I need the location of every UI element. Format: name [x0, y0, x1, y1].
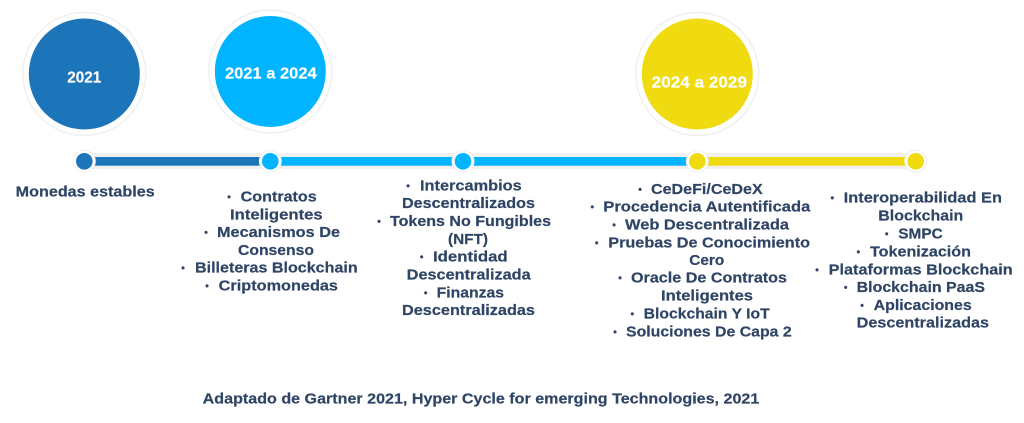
list: column 3: Tokens No Fungibles [390, 213, 551, 230]
circle: 2021: 2021 [67, 70, 101, 87]
circle: 2021 a 2024: 2021 a 2024 [225, 65, 317, 82]
list: column 2: • [205, 281, 209, 293]
list: column 4: CeDeFi/CeDeX [651, 181, 763, 198]
timeline bar with nodes [73, 150, 927, 172]
list: column 3: • [424, 287, 428, 299]
list: column 5: Plataformas Blockchain [829, 261, 1013, 278]
list: column 4: • [613, 326, 617, 338]
circle: 2024 a 2029: 2024 a 2029 [652, 74, 747, 91]
list: column 4: Soluciones De Capa 2 [626, 323, 792, 340]
list: column 5: • [844, 282, 848, 294]
list: column 5: Blockchain PaaS [857, 279, 985, 296]
list: column 5: Tokenización [870, 243, 971, 260]
list: column 3: Descentralizadas [402, 302, 535, 319]
list: column 3: Identidad [433, 249, 508, 266]
list: column 2: Billeteras Blockchain [195, 260, 358, 277]
list: column 5: Blockchain [878, 208, 963, 225]
list: column 2: Contratos [241, 189, 317, 206]
list: column 5: Descentralizadas [857, 315, 989, 332]
list: column 4: Inteligentes [661, 288, 753, 305]
list: column 3: Descentralizada [407, 266, 531, 283]
circle: 2021 [23, 12, 146, 136]
circle: 2024 a 2029 [636, 12, 759, 136]
list: column 4 [590, 181, 811, 340]
list: column 5: SMPC [898, 226, 943, 243]
list: column 3: • [377, 216, 381, 228]
list: column 3: • [406, 181, 410, 193]
list: column 4: Web Descentralizada [625, 217, 790, 234]
text: Monedas estables: Monedas estables [16, 184, 155, 201]
list: column 5: • [815, 264, 819, 276]
list: column 4: • [590, 202, 594, 214]
list: column 3: Descentralizados [402, 195, 535, 212]
list: column 2: Criptomonedas [219, 278, 338, 295]
list: column 2: Mecanismos De [217, 224, 340, 241]
list: column 5: • [885, 229, 889, 241]
list: column 3: Intercambios [420, 178, 522, 195]
source note: Adaptado de Gartner 2021, Hyper Cycle for emerging Technologies, 2021 [203, 390, 759, 407]
list: column 4: Blockchain Y IoT [644, 305, 770, 322]
list: column 5: Aplicaciones [874, 297, 972, 314]
list: column 3: • [420, 252, 424, 264]
list: column 2: Inteligentes [230, 206, 323, 224]
list: column 3 [377, 178, 551, 319]
list: column 4: • [638, 184, 642, 196]
list: column 3: Finanzas [437, 284, 504, 301]
list: column 4: Pruebas De Conocimiento [608, 234, 810, 251]
list: column 4: • [612, 220, 616, 232]
list: column 2: Consenso [238, 242, 314, 259]
list: column 2: • [181, 263, 185, 275]
list: column 4: Oracle De Contratos [631, 270, 787, 287]
list: column 2: • [227, 192, 231, 204]
list: column 2 [181, 189, 358, 295]
list: column 4: • [618, 273, 622, 285]
circle: 2021 a 2024 [209, 10, 332, 133]
list: column 2: • [204, 227, 208, 239]
list: column 5 [815, 190, 1013, 332]
list: column 5: • [856, 246, 860, 258]
list: column 5: Interoperabilidad En [844, 190, 1002, 207]
list: column 4: Procedencia Autentificada [603, 199, 811, 216]
list: column 3: (NFT) [448, 231, 488, 248]
list: column 4: • [595, 237, 599, 249]
list: column 5: • [860, 300, 864, 312]
list: column 5: • [830, 193, 834, 205]
list: column 4: Cero [689, 252, 724, 269]
list: column 4: • [630, 308, 634, 320]
